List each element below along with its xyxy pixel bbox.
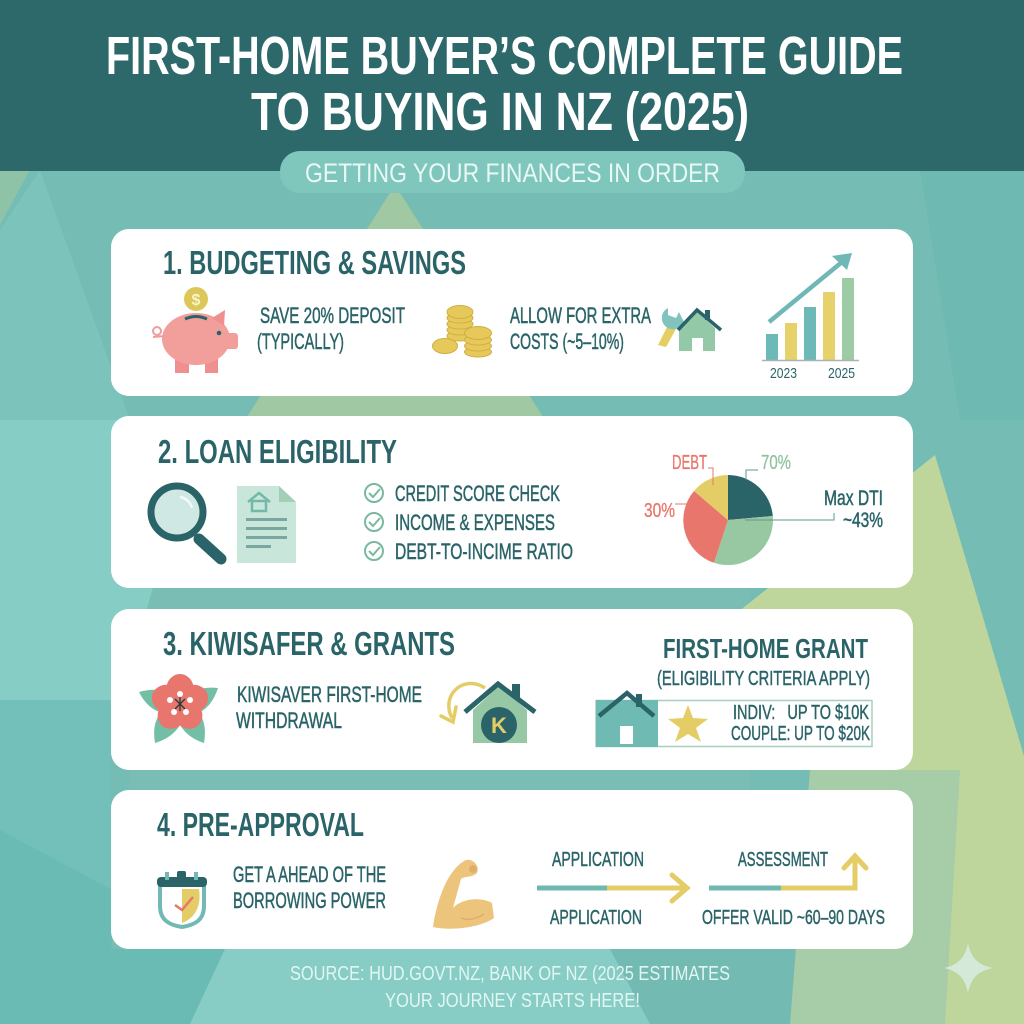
checklist: CREDIT SCORE CHECK [395, 481, 560, 506]
pie chart: debt-to-income: 70% [761, 452, 791, 474]
process arrow 1: APPLICATION [552, 849, 644, 871]
text: save deposit: (TYPICALLY) [257, 329, 344, 354]
pie chart: debt-to-income: Max DTI [824, 487, 883, 510]
icon: flexed arm [433, 860, 494, 929]
sparkle mark [944, 943, 993, 993]
heading: pre-approval: 4. PRE-APPROVAL [157, 806, 364, 843]
subtitle pill [280, 151, 745, 193]
text: extra costs: ALLOW FOR EXTRA [510, 303, 651, 328]
icon: calendar shield [157, 871, 207, 927]
footer source and tagline: YOUR JOURNEY STARTS HERE! [385, 990, 640, 1012]
header banner [0, 0, 1024, 171]
text: kiwisaver withdrawal [236, 682, 422, 733]
text: extra costs [510, 303, 651, 354]
panel: loan eligibility [111, 416, 913, 588]
title: TO BUYING IN NZ (2025) [251, 82, 749, 142]
text: extra costs: COSTS (~5–10%) [510, 329, 624, 354]
bar chart: 2023 to 2025 [762, 253, 859, 382]
icon: document with house [237, 486, 296, 563]
icon: piggy bank [153, 287, 238, 373]
icon: house with K and arrow: K [491, 713, 507, 738]
bar chart: 2023 to 2025: 2023 [770, 365, 797, 382]
footer source and tagline [290, 963, 730, 1012]
pie chart: debt-to-income: ~43% [843, 509, 883, 532]
pie chart: debt-to-income: 30% [644, 500, 675, 522]
first-home grant heading: (ELIGIBILITY CRITERIA APPLY) [657, 668, 870, 690]
text: save deposit: SAVE 20% DEPOSIT [260, 303, 405, 328]
pie chart: debt-to-income: DEBT [672, 452, 707, 474]
first-home grant heading: FIRST-HOME GRANT [663, 633, 868, 664]
process arrow 2: OFFER VALID ~60–90 DAYS [702, 907, 885, 929]
icon: star [668, 705, 708, 742]
pie chart: debt-to-income [644, 452, 883, 565]
bar chart: 2023 to 2025: 2025 [828, 365, 855, 382]
title [106, 26, 903, 142]
first-home grant heading [657, 633, 870, 690]
footer source and tagline: SOURCE: HUD.GOVT.NZ, BANK OF NZ (2025 ESTIMATES [290, 963, 730, 985]
panel: kiwisaver and grants [111, 609, 913, 770]
heading: budgeting and savings: 1. BUDGETING & SAVINGS [163, 244, 466, 281]
text: borrowing power: BORROWING POWER [233, 888, 386, 913]
icon: magnifying glass [151, 486, 221, 559]
text: kiwisaver withdrawal: WITHDRAWAL [236, 708, 342, 733]
grant box: COUPLE: UP TO $20K [731, 723, 870, 745]
text: kiwisaver withdrawal: KIWISAVER FIRST-HOME [237, 682, 422, 707]
panel: pre-approval [111, 790, 913, 949]
process arrow 2: ASSESSMENT [738, 849, 828, 871]
grant box: INDIV: UP TO $10K [733, 702, 869, 724]
text: borrowing power [233, 862, 386, 913]
grant box [596, 693, 872, 747]
text: borrowing power: GET A AHEAD OF THE [233, 862, 386, 887]
icon: coins [432, 306, 492, 357]
heading: loan eligibility: 2. LOAN ELIGIBILITY [158, 433, 397, 470]
process arrow 2 [702, 849, 885, 929]
checklist: INCOME & EXPENSES [395, 510, 555, 535]
checklist [365, 481, 573, 564]
panel: budgeting and savings [111, 229, 913, 396]
heading: kiwisafer and grants: 3. KIWISAFER & GRANTS [163, 625, 455, 662]
icon: pohutukawa flower [139, 674, 218, 743]
icon: piggy bank: $ [192, 292, 201, 309]
icon: house with K and arrow [441, 683, 535, 743]
text: save deposit [257, 303, 405, 354]
icon: house with wrench [658, 308, 721, 351]
process arrow 1: APPLICATION [550, 907, 642, 929]
subtitle pill: GETTING YOUR FINANCES IN ORDER [305, 158, 720, 188]
checklist: DEBT-TO-INCIME RATIO [395, 539, 573, 564]
process arrow 1 [537, 849, 687, 929]
